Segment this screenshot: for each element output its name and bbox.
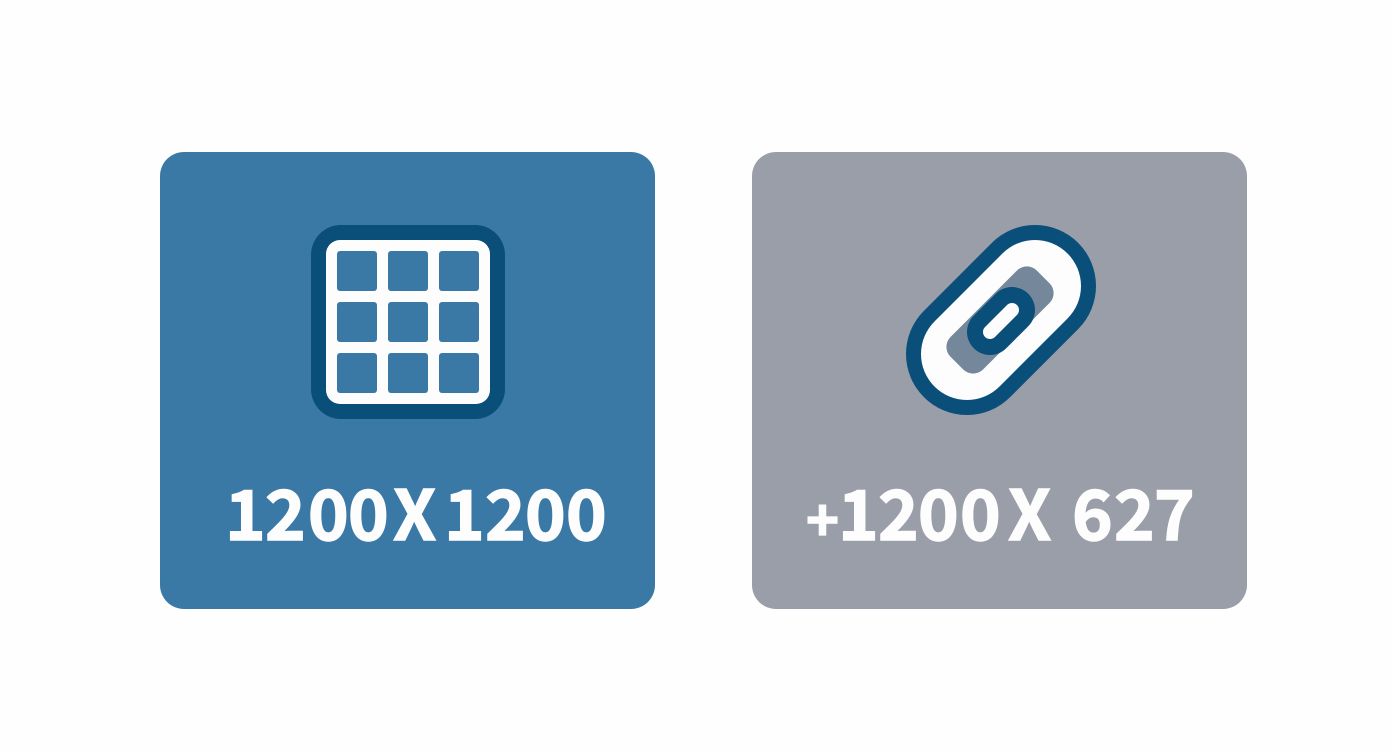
label: 1200X1200: 1200X1200	[225, 460, 607, 560]
panel: landscape format	[752, 152, 1247, 609]
icon: square grid	[311, 225, 505, 419]
panel: square format	[160, 152, 655, 609]
label: +1200 X 627: X	[1008, 460, 1051, 560]
label: +1200 X 627: 627	[1072, 460, 1195, 560]
label: +1200 X 627: +	[806, 477, 839, 558]
label: +1200 X 627: 1200	[838, 460, 1001, 560]
icon: link	[941, 261, 1059, 379]
